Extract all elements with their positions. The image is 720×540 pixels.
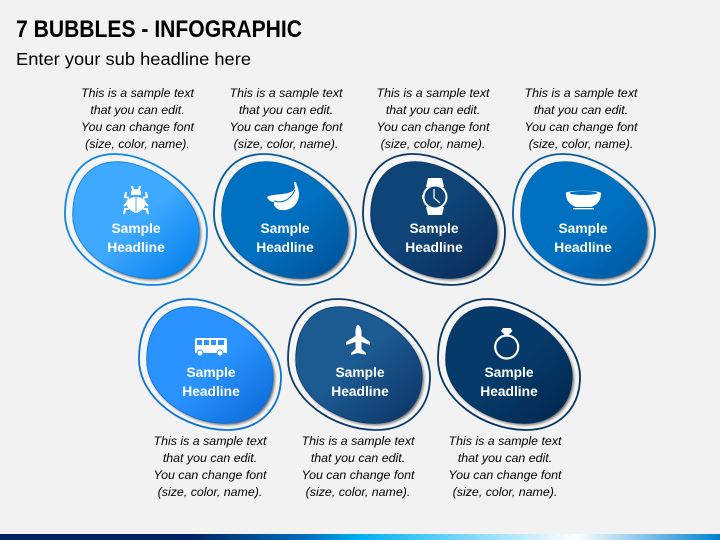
text block: bottom 1: This is a sample text bbox=[154, 434, 267, 448]
icon: watch bbox=[422, 178, 446, 215]
label: Headline bbox=[480, 384, 538, 399]
bubble 6: plane bbox=[288, 299, 430, 430]
text block: bottom 2: This is a sample text bbox=[302, 434, 415, 448]
icon: plane bbox=[346, 325, 370, 355]
bubble 4: bowl bbox=[513, 154, 655, 285]
text block: bottom 1: You can change font bbox=[154, 468, 267, 482]
label: Headline bbox=[256, 240, 314, 255]
text block: top 1: that you can edit. bbox=[90, 103, 185, 117]
label bbox=[554, 221, 612, 255]
label bbox=[256, 221, 314, 255]
bubble 5: bus bbox=[139, 299, 281, 430]
text block: bottom 2: (size, color, name). bbox=[306, 485, 410, 499]
text block: top 4: (size, color, name). bbox=[529, 137, 633, 151]
icon: bowl bbox=[566, 191, 601, 209]
text block: top 3: (size, color, name). bbox=[381, 137, 485, 151]
text block: top 2: This is a sample text bbox=[230, 86, 343, 100]
text block: top 1: This is a sample text bbox=[81, 86, 195, 100]
text block: bottom 2: You can change font bbox=[302, 468, 415, 482]
text block: bottom 1: (size, color, name). bbox=[158, 485, 262, 499]
text block: bottom 3: (size, color, name). bbox=[453, 485, 557, 499]
label: Headline bbox=[331, 384, 389, 399]
text block: bottom 3: that you can edit. bbox=[458, 451, 552, 465]
bubble 1: bug bbox=[65, 154, 207, 285]
bubble 2: banana bbox=[214, 154, 356, 285]
text block: top 2: that you can edit. bbox=[239, 103, 333, 117]
label: Sample bbox=[558, 221, 608, 236]
label: Sample bbox=[260, 221, 310, 236]
label: Sample bbox=[186, 365, 236, 380]
text block: top 2 bbox=[230, 86, 343, 151]
text block: bottom 3: This is a sample text bbox=[449, 434, 562, 448]
text block: bottom 3: You can change font bbox=[448, 468, 562, 482]
text block: top 4 bbox=[524, 86, 638, 151]
icon: banana bbox=[267, 182, 299, 210]
label bbox=[405, 221, 463, 255]
text block: top 2: You can change font bbox=[230, 120, 343, 134]
label: Sample bbox=[335, 365, 385, 380]
label: Headline bbox=[554, 240, 612, 255]
label: Sample bbox=[484, 365, 534, 380]
label: Headline bbox=[107, 240, 165, 255]
bubble 7: ring bbox=[438, 299, 580, 430]
label: Sample bbox=[111, 221, 161, 236]
text block: top 1 bbox=[81, 86, 195, 151]
text block: top 1: You can change font bbox=[81, 120, 195, 134]
text block: top 3 bbox=[376, 86, 490, 151]
text block: top 1: (size, color, name). bbox=[85, 137, 190, 151]
icon: bug bbox=[124, 186, 148, 214]
text block: top 4: You can change font bbox=[524, 120, 638, 134]
title: 7 BUBBLES - INFOGRAPHIC bbox=[16, 16, 302, 43]
icon: bus bbox=[195, 338, 227, 356]
label: Sample bbox=[409, 221, 459, 236]
text block: bottom 1 bbox=[154, 434, 267, 499]
text block: top 3: You can change font bbox=[376, 120, 490, 134]
footer gradient bar bbox=[0, 534, 720, 540]
label bbox=[331, 365, 389, 399]
label: Headline bbox=[182, 384, 240, 399]
sub headline: Enter your sub headline here bbox=[16, 49, 251, 69]
text block: bottom 1: that you can edit. bbox=[163, 451, 257, 465]
label: Headline bbox=[405, 240, 463, 255]
text block: bottom 2: that you can edit. bbox=[311, 451, 405, 465]
bubble 3: watch bbox=[363, 154, 505, 285]
text block: top 2: (size, color, name). bbox=[234, 137, 338, 151]
label bbox=[480, 365, 538, 399]
text block: top 4: This is a sample text bbox=[525, 86, 638, 100]
text block: top 3: that you can edit. bbox=[386, 103, 480, 117]
text block: top 3: This is a sample text bbox=[377, 86, 490, 100]
icon: ring bbox=[495, 328, 518, 358]
label bbox=[107, 221, 165, 255]
label bbox=[182, 365, 240, 399]
text block: bottom 2 bbox=[302, 434, 415, 499]
text block: top 4: that you can edit. bbox=[534, 103, 628, 117]
text block: bottom 3 bbox=[448, 434, 562, 499]
